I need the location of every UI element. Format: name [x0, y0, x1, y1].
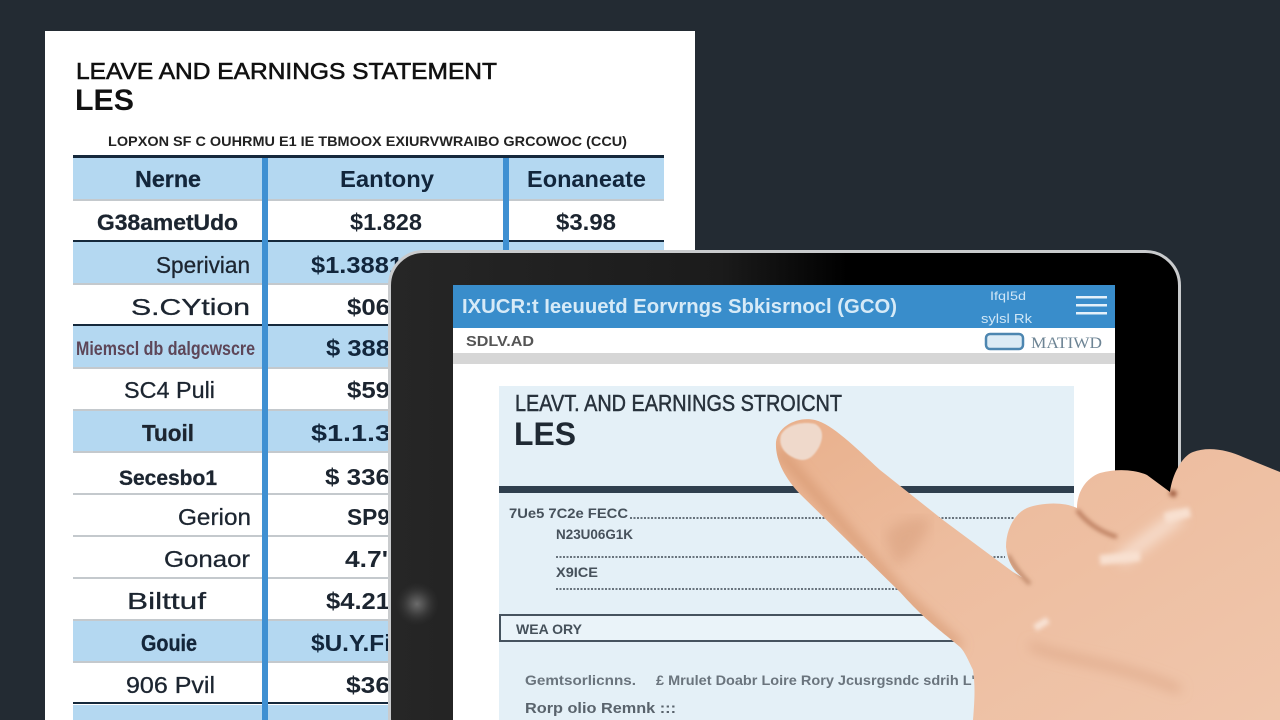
table first column labels: Miemscl db dalgcwscre	[76, 339, 255, 360]
table second column values: SP9	[347, 504, 390, 530]
panel: paper statement	[45, 31, 695, 720]
icon: tablet camera	[396, 583, 438, 625]
fine print	[525, 672, 975, 717]
screen document title: LEAVT. AND EARNINGS STROICNT	[515, 390, 842, 416]
hand pointing at the screen	[776, 419, 1280, 720]
table second column values: $4.21	[326, 588, 390, 614]
table second column values: $1.3881	[311, 252, 403, 278]
fine print: Gemtsorlicnns.	[525, 672, 636, 688]
form lines: 7Ue5 7C2e FECC	[509, 505, 628, 521]
screen header bar: sylsl Rk	[981, 311, 1033, 326]
form lines: X9ICE	[556, 564, 598, 580]
table first column labels: Gonaor	[164, 546, 250, 572]
statement title: LEAVE AND EARNINGS STATEMENT	[76, 58, 497, 84]
table second column values: $36	[346, 672, 390, 698]
table rules	[73, 155, 664, 704]
table row bands	[73, 158, 664, 720]
screen sub bar: MATIWD	[1031, 335, 1102, 352]
fine print: Rorp olio Remnk :::	[525, 700, 676, 717]
table first column labels: S.CYtion	[131, 294, 250, 320]
table first column labels: Secesbo1	[119, 467, 217, 490]
table second column values: $06	[347, 294, 390, 320]
tablet screen	[453, 285, 1115, 720]
statement title: LES	[75, 84, 134, 117]
table first column labels: 906 Pvil	[126, 672, 215, 698]
table second column values	[311, 166, 434, 698]
statement subtitle: LOPXON SF C OUHRMU E1 IE TBMOOX EXIURVWRAIBO GRCOWOC (CCU)	[108, 133, 627, 149]
table first column labels: G38ametUdo	[97, 210, 238, 235]
table first column labels: Sperivian	[156, 252, 250, 278]
table third column values: $3.98	[556, 209, 616, 235]
finger knuckle crease	[886, 518, 928, 562]
icon: status pill	[986, 334, 1023, 349]
table first column labels: Gerion	[178, 504, 251, 530]
screen header bar: IfqI5d	[990, 289, 1026, 303]
icon: hamburger menu	[1076, 296, 1107, 314]
boxed field	[500, 615, 1020, 641]
screen sub bar	[453, 333, 1115, 364]
table second column values: $ 336	[325, 464, 390, 490]
table column dividers	[262, 158, 509, 720]
fingernail	[780, 423, 822, 460]
document panel on screen: LES	[514, 416, 576, 452]
screen header bar	[453, 285, 1115, 328]
table second column values: Eantony	[340, 166, 434, 192]
table first column labels: SC4 Puli	[124, 377, 215, 403]
table third column values: Eonaneate	[527, 166, 646, 192]
table first column labels: Gouie	[141, 630, 197, 656]
table	[73, 155, 664, 720]
statement title	[75, 58, 497, 117]
table second column values: $U.Y.Fi	[311, 630, 391, 656]
table first column labels: Tuoil	[142, 420, 194, 446]
form lines: N23U06G1K	[556, 526, 633, 542]
hand shading	[778, 450, 1190, 690]
tablet body	[390, 252, 1180, 720]
form lines	[509, 505, 633, 580]
screen header bar: IXUCR:t Ieeuuetd Eorvrngs Sbkisrnocl (GCO)	[462, 296, 897, 318]
table first column labels: Nerne	[135, 166, 201, 192]
table second column values: $1.828	[350, 209, 422, 235]
table first column labels: Bilttuf	[127, 588, 207, 614]
table second column values: 4.7'	[345, 546, 388, 572]
boxed field: WEA ORY	[516, 621, 583, 637]
table first column labels	[76, 166, 255, 698]
table second column values: $1.1.3	[311, 420, 391, 446]
document panel on screen	[499, 386, 1074, 720]
screen sub bar: SDLV.AD	[466, 333, 534, 350]
table second column values: $59	[347, 377, 390, 403]
table third column values	[527, 166, 646, 235]
tablet	[390, 252, 1180, 720]
fine print: £ Mrulet Doabr Loire Rory Jcusrgsndc sdrih L'	[656, 672, 975, 688]
table second column values: $ 388	[326, 335, 390, 361]
